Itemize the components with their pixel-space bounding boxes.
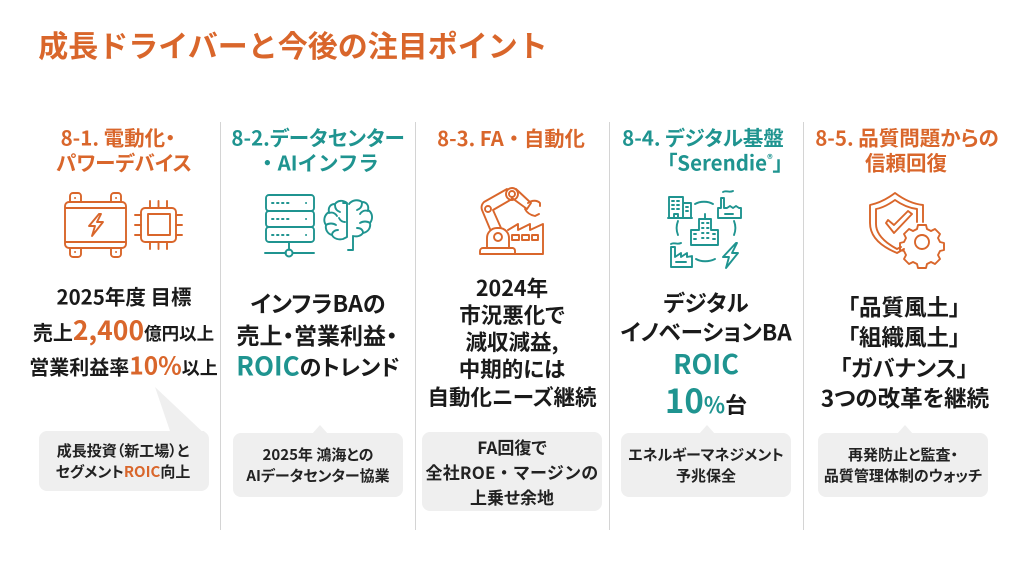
panel: 8-3 FA automation bbox=[422, 122, 602, 511]
body text: 2025 targets: 売上2,400億円以上 bbox=[33, 309, 214, 348]
icon: connected city bbox=[667, 190, 742, 269]
icon: robot arm and factory bbox=[479, 187, 544, 255]
body text: digital innovation BA: ROIC bbox=[673, 343, 739, 382]
panel: 8-5 quality bbox=[815, 122, 999, 497]
icon: shield and gear bbox=[869, 192, 945, 269]
body text: three reforms bbox=[821, 290, 989, 414]
callout: prevention and audit: 再発防止と監査・ bbox=[848, 444, 958, 465]
callout: FA recovery: 全社ROE・マージンの bbox=[426, 459, 598, 484]
body text: 2025 targets: 2025年度 目標 bbox=[56, 281, 192, 311]
heading: 8-1: パワーデバイス bbox=[56, 147, 192, 177]
callout: hon hai: 2025年 鴻海との bbox=[263, 444, 373, 465]
body text: 2024: 2024年 bbox=[476, 272, 548, 303]
body text: infra BA: インフラBAの bbox=[250, 285, 386, 319]
callout: FA recovery: 上乗せ余地 bbox=[470, 484, 554, 509]
title: 成長ドライバーと今後の注目ポイント bbox=[38, 22, 548, 66]
callout: prevention and audit bbox=[818, 426, 988, 497]
body text: digital innovation BA bbox=[620, 286, 792, 423]
icon: battery and chip bbox=[64, 192, 183, 258]
callout: energy management: エネルギーマネジメント bbox=[628, 444, 784, 465]
callout: growth investment: セグメントROIC向上 bbox=[56, 461, 190, 482]
panel: 8-4 digital platform bbox=[620, 122, 792, 497]
heading: 8-3: 8-3. FA・自動化 bbox=[437, 122, 585, 152]
callout: prevention and audit: 品質管理体制のウォッチ bbox=[824, 465, 982, 486]
callout: FA recovery bbox=[422, 432, 602, 511]
callout: growth investment: 成長投資（新工場）と bbox=[57, 440, 189, 461]
callout: energy management: 予兆保全 bbox=[676, 465, 736, 486]
body text: 2024: 中期的には bbox=[459, 353, 565, 384]
body text: 2024 bbox=[427, 272, 597, 412]
body text: infra BA bbox=[236, 285, 400, 383]
body text: three reforms: 「ガバナンス」 bbox=[840, 352, 968, 384]
callout: hon hai: AIデータセンター協業 bbox=[246, 465, 390, 486]
body text: three reforms: 「組織風土」 bbox=[848, 320, 960, 352]
panel: 8-2 data center bbox=[231, 122, 405, 497]
callout: hon hai bbox=[233, 426, 403, 497]
body text: digital innovation BA: 10%台 bbox=[665, 375, 747, 423]
callout: energy management bbox=[621, 426, 791, 497]
heading: 8-5: 8-5. 品質問題からの bbox=[815, 122, 999, 152]
heading: 8-2 bbox=[231, 122, 405, 177]
body text: infra BA: 売上・営業利益・ bbox=[236, 317, 398, 351]
body text: 2024: 自動化ニーズ継続 bbox=[427, 381, 597, 412]
body text: three reforms: 「品質風土」 bbox=[848, 290, 960, 322]
callout: growth investment bbox=[39, 388, 209, 491]
body text: digital innovation BA: イノベーションBA bbox=[620, 316, 792, 348]
heading: 8-4: 8-4. デジタル基盤 bbox=[622, 122, 784, 152]
heading: 8-4 bbox=[622, 122, 784, 177]
heading: 8-2: 8-2.データセンター bbox=[231, 122, 405, 152]
heading: 8-5 bbox=[815, 122, 999, 177]
callout: FA recovery: FA回復で bbox=[477, 434, 547, 459]
body text: 2024: 市況悪化で bbox=[459, 299, 565, 330]
body text: 2025 targets: 営業利益率10%以上 bbox=[29, 347, 218, 382]
heading: 8-1: 8-1. 電動化・ bbox=[61, 122, 175, 152]
body text: infra BA: ROICのトレンド bbox=[236, 346, 400, 383]
heading: 8-5: 信頼回復 bbox=[865, 147, 947, 177]
body text: 2024: 減収減益, bbox=[466, 326, 558, 357]
panel: 8-1 electrification bbox=[29, 122, 218, 491]
heading: 8-4: 「Serendie®」 bbox=[667, 147, 783, 177]
icon: server and brain bbox=[264, 194, 373, 258]
heading: 8-2: ・AIインフラ bbox=[257, 147, 379, 177]
body text: 2025 targets bbox=[29, 281, 218, 382]
heading: 8-1 bbox=[56, 122, 192, 177]
body text: digital innovation BA: デジタル bbox=[663, 286, 749, 318]
body text: three reforms: 3つの改革を継続 bbox=[821, 382, 989, 414]
